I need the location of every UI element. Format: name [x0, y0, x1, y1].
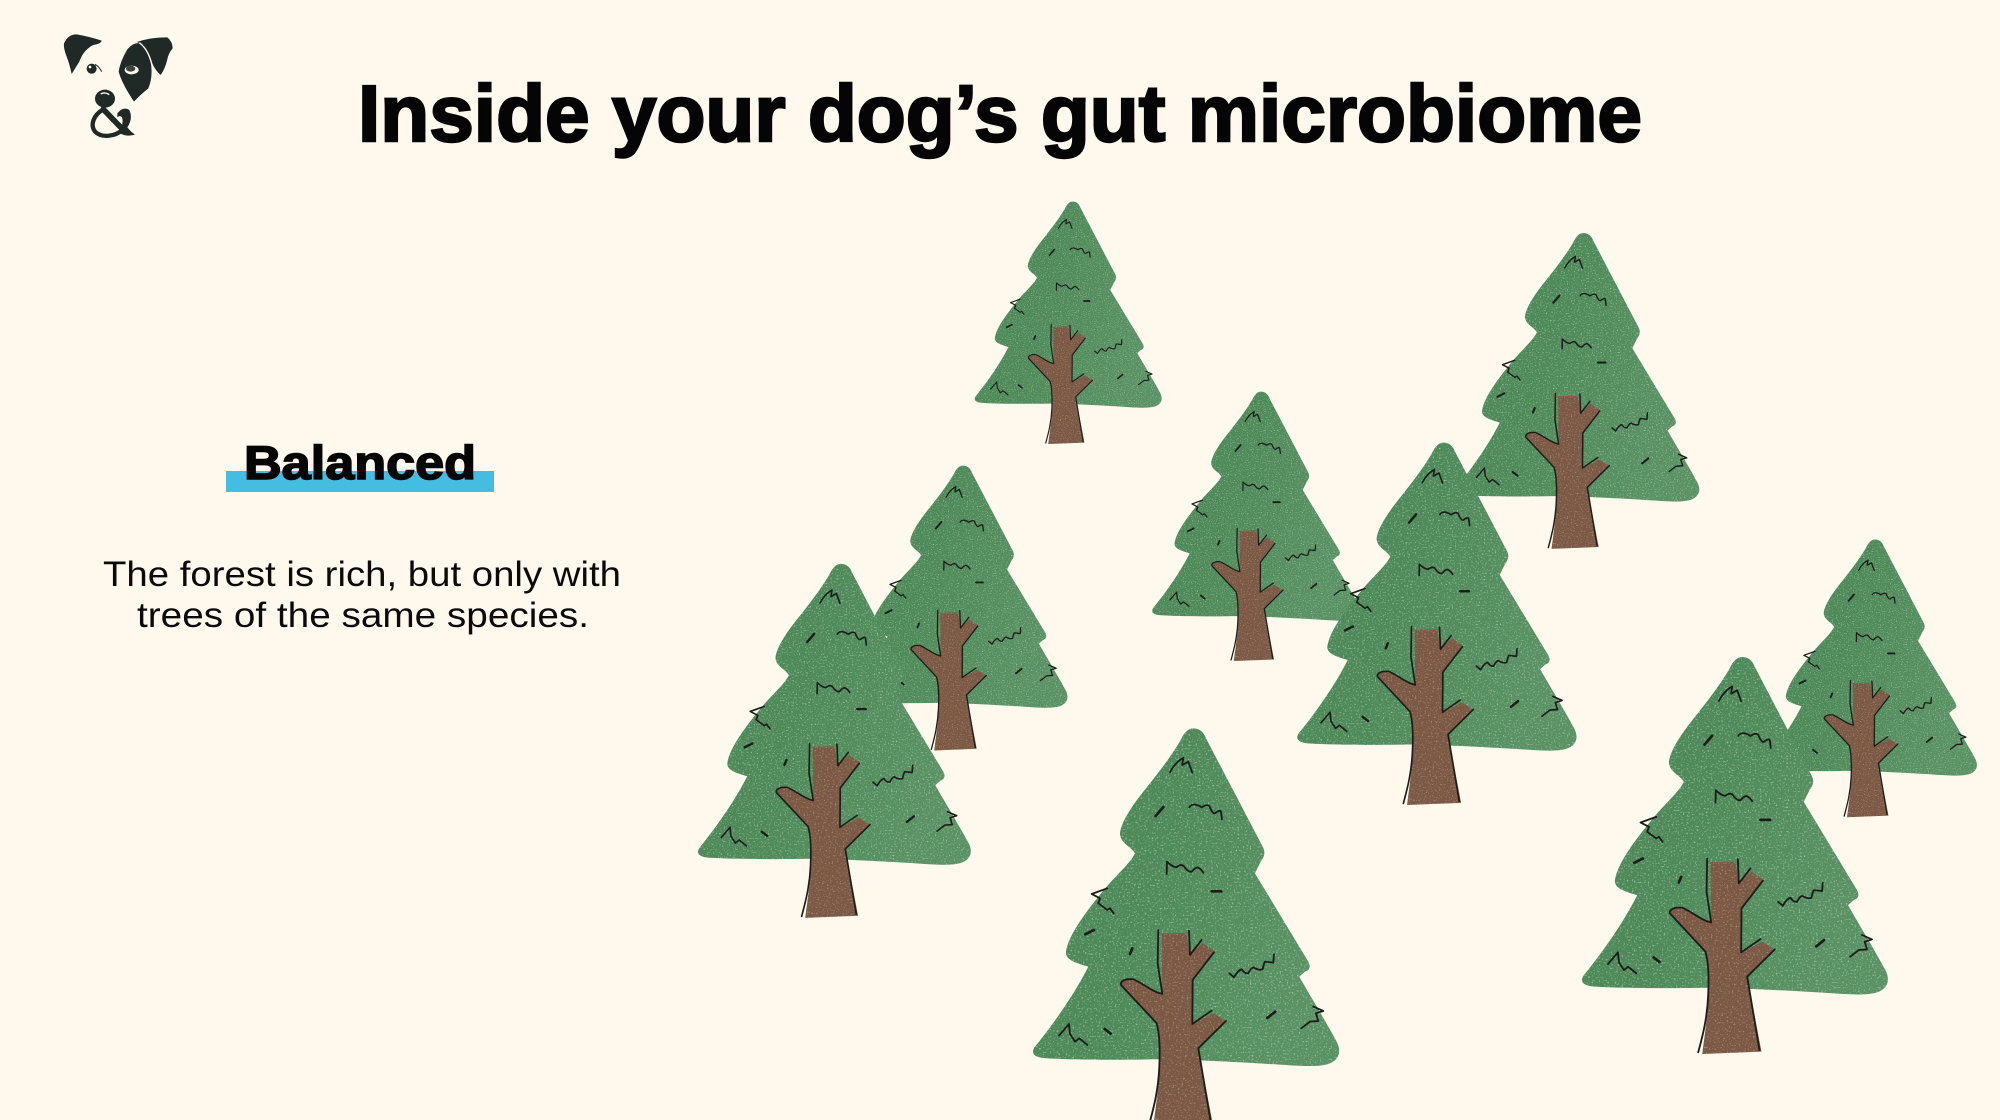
tree: right front	[1582, 657, 1888, 1054]
tree: left back	[848, 466, 1067, 750]
tree: middle	[1152, 392, 1360, 661]
text block: description: trees of the same species.	[137, 596, 589, 635]
heading: Balanced with blue highlight: Balanced	[244, 436, 476, 489]
title: Inside your dog’s gut microbiome	[358, 69, 1642, 158]
text block: description	[103, 555, 621, 635]
tree: upper right	[1456, 233, 1699, 549]
illustration: forest of same-species trees	[698, 201, 1977, 1120]
tree: top centre	[975, 201, 1162, 444]
icon: dog face logo	[64, 34, 173, 136]
tree: bottom centre	[1033, 728, 1339, 1120]
text block: description: The forest is rich, but only with	[103, 555, 621, 594]
tree: left front	[698, 564, 971, 918]
tree: centre large	[1297, 443, 1576, 805]
tree: far right back	[1763, 540, 1977, 817]
